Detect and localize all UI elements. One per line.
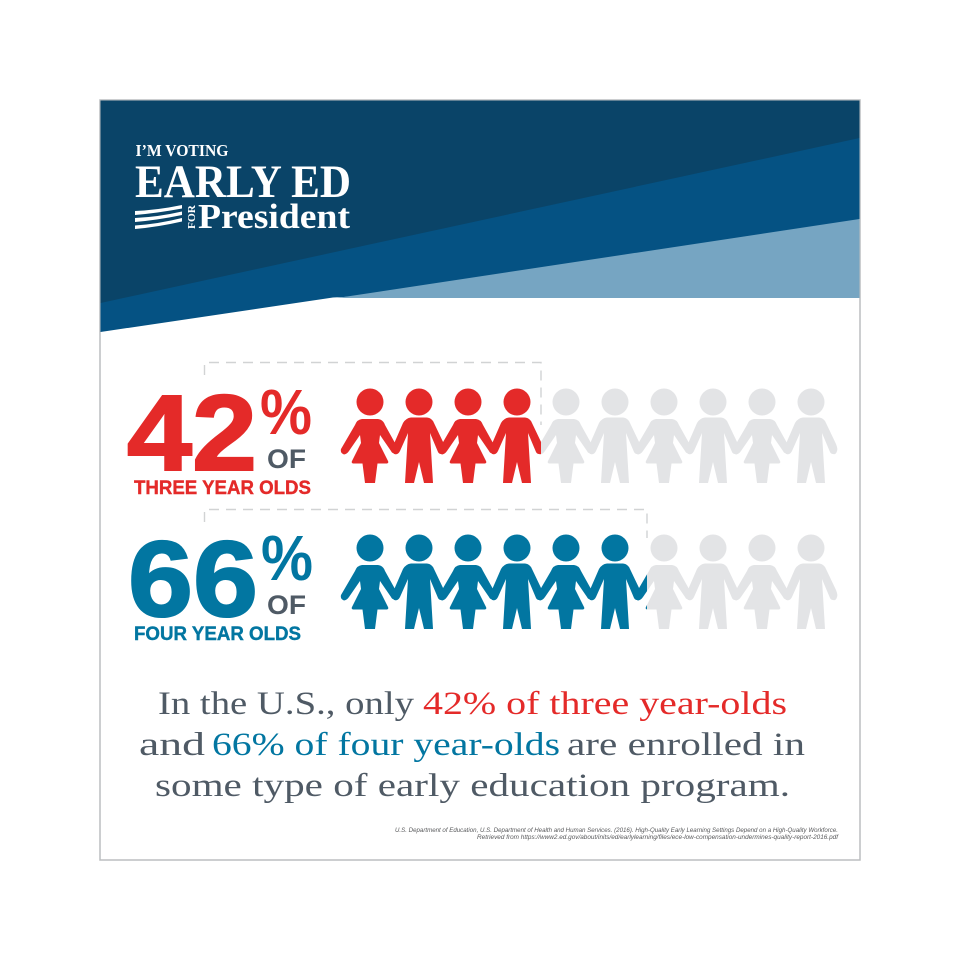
- grey people: [537, 388, 837, 483]
- label: four year olds: FOUR YEAR OLDS: [134, 624, 301, 645]
- number 66: 66: [128, 518, 258, 639]
- stat: 66 percent of four year olds: [128, 518, 313, 645]
- source citation: [395, 828, 839, 841]
- pictogram: 42 percent row: [341, 388, 837, 483]
- summary text: In the U.S., only: [158, 686, 415, 722]
- red people: [341, 388, 543, 483]
- pictogram: 66 percent row: [341, 534, 837, 629]
- logo: I'm voting Early Ed for President: [135, 141, 351, 236]
- summary text: some type of early education program.: [155, 768, 790, 804]
- of: OF: [267, 444, 306, 474]
- percent sign: %: [260, 376, 312, 448]
- logo stripes: [135, 205, 182, 229]
- summary text: and: [139, 727, 206, 763]
- logo line: I'm voting: I’M VOTING: [136, 141, 229, 160]
- percent sign: %: [261, 522, 313, 594]
- dashed bracket: 66 percent: [204, 510, 647, 538]
- grey people: [635, 534, 837, 629]
- summary text: are enrolled in: [567, 727, 805, 763]
- stat: 42 percent of three year olds: [127, 372, 312, 499]
- panel: card frame: [100, 100, 860, 860]
- header banner: [100, 100, 860, 332]
- number 42: 42: [127, 372, 257, 493]
- logo word: for: FOR: [186, 204, 198, 229]
- source citation: Retrieved from https://www2.ed.gov/about/inits/ed/earlylearning/files/ece-low-compensation-undermines-quality-report-2016.pdf: [477, 835, 839, 841]
- of: OF: [267, 590, 306, 620]
- blue people: [340, 534, 647, 629]
- dashed bracket: 42 percent: [204, 362, 541, 425]
- label: three year olds: THREE YEAR OLDS: [134, 478, 311, 499]
- summary text: 66% of four year-olds: [212, 727, 560, 763]
- logo word: President: President: [198, 197, 350, 236]
- source citation: U.S. Department of Education, U.S. Department of Health and Human Services. (2016). High-Quality Early Learning Settings Depend on a High-Quality Workforce.: [395, 828, 838, 834]
- logo line: Early Ed: EARLY ED: [135, 156, 351, 208]
- summary text: 42% of three year-olds: [423, 686, 787, 722]
- summary text: [139, 686, 805, 804]
